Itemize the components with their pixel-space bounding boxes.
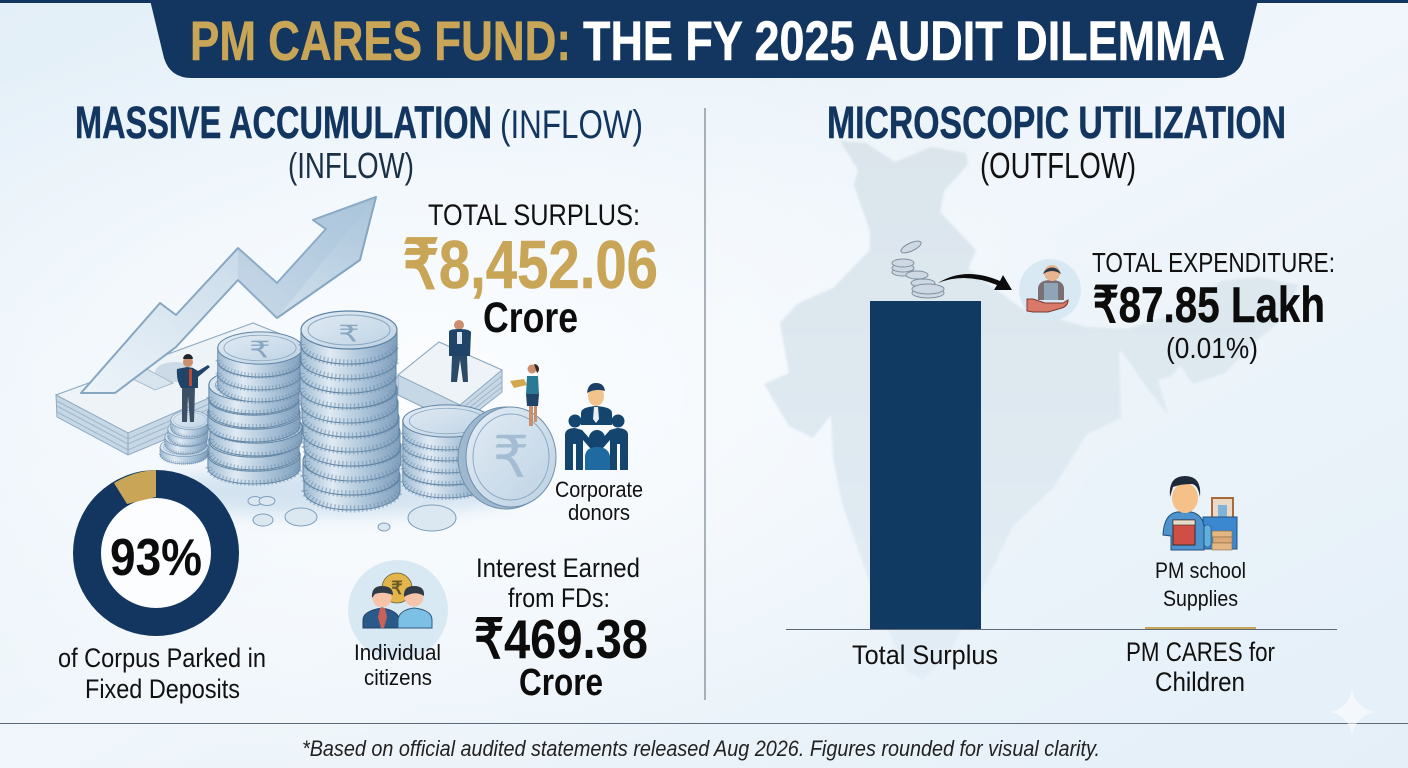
donut caption: Fixed Deposits: [85, 674, 240, 704]
donut caption: [58, 643, 266, 704]
corporate donors: donors: [568, 500, 630, 525]
footnote: *Based on official audited statements released Aug 2026. Figures rounded for visual clarity.: [302, 736, 1100, 761]
corporate donors: [555, 383, 643, 525]
PM school supplies: PM school: [1155, 558, 1246, 583]
total expenditure block: [1092, 247, 1335, 365]
bar: total surplus: [870, 301, 981, 629]
axis label: total surplus: Total Surplus: [852, 640, 998, 670]
total surplus block: TOTAL SURPLUS:: [428, 199, 640, 232]
coin stack center: ₹: [338, 322, 360, 347]
scattered coins: [248, 496, 456, 531]
total expenditure block: TOTAL EXPENDITURE:: [1092, 247, 1335, 278]
total surplus block: Crore: [483, 294, 578, 342]
title: PM CARES FUND:: [190, 9, 571, 72]
icon: child with school supplies: [1163, 476, 1237, 550]
right heading: [827, 97, 1286, 186]
axis label: PM CARES for Children: [1126, 637, 1275, 697]
coin stack left: [208, 332, 302, 484]
right heading: (OUTFLOW): [980, 145, 1136, 186]
coin stack center: [300, 311, 401, 510]
sparkle mark: [1330, 688, 1376, 736]
total surplus block: ₹8,452.06: [403, 227, 658, 303]
large upright coin: [458, 407, 556, 509]
left heading: [75, 97, 643, 186]
figure: woman with book: [510, 364, 539, 426]
bar: PM CARES for Children: [1145, 627, 1256, 629]
axis label: PM CARES for Children: Children: [1155, 667, 1245, 697]
bottom rule: [0, 722, 1408, 724]
total surplus block: [403, 199, 658, 342]
illustration: money, coins and rising arrow: [56, 197, 556, 531]
individual citizens: citizens: [364, 665, 432, 690]
divider: [704, 108, 706, 700]
left heading: (INFLOW): [500, 103, 643, 147]
large upright coin: ₹: [493, 425, 529, 490]
individual citizens: [348, 560, 448, 690]
total expenditure block: (0.01%): [1166, 333, 1258, 365]
total expenditure block: ₹87.85 Lakh: [1093, 277, 1325, 333]
PM school supplies: Supplies: [1163, 586, 1238, 611]
icon: citizens: ₹: [391, 578, 403, 598]
interest earned block: ₹469.38: [474, 608, 648, 670]
icon: small coins on bar: [892, 239, 944, 298]
donut caption: of Corpus Parked in: [58, 643, 266, 673]
header banner: [0, 0, 1408, 78]
interest earned block: Interest Earned: [476, 553, 640, 583]
left heading: (INFLOW): [288, 145, 414, 186]
coin stack left: ₹: [249, 338, 271, 363]
interest earned block: [474, 553, 648, 704]
individual citizens: Individual: [354, 640, 441, 665]
rising arrow: [81, 197, 376, 393]
figure: businessman right: [449, 320, 471, 382]
coin stack right: [403, 405, 491, 498]
india map silhouette: [764, 141, 1299, 680]
donut chart: 93 percent: 93%: [110, 529, 202, 587]
corporate donors: Corporate: [555, 477, 643, 502]
PM school supplies: [1155, 476, 1246, 611]
left heading: MASSIVE ACCUMULATION: [75, 97, 492, 148]
arrow: coins to expenditure: [938, 274, 1012, 290]
figure base: small coin stack: [160, 410, 209, 464]
axis label: PM CARES for Children: PM CARES for: [1126, 637, 1275, 667]
interest earned block: from FDs:: [508, 583, 610, 613]
figure: businessman left: [177, 354, 210, 422]
title: THE FY 2025 AUDIT DILEMMA: [583, 9, 1225, 72]
icon: corporate people: [565, 383, 628, 470]
icon: child in hand: [1019, 259, 1081, 321]
banknote stacks: [56, 323, 502, 455]
interest earned block: Crore: [519, 662, 603, 704]
donut chart: 93 percent: [87, 470, 225, 622]
bar chart: surplus versus spending: [786, 301, 1337, 697]
